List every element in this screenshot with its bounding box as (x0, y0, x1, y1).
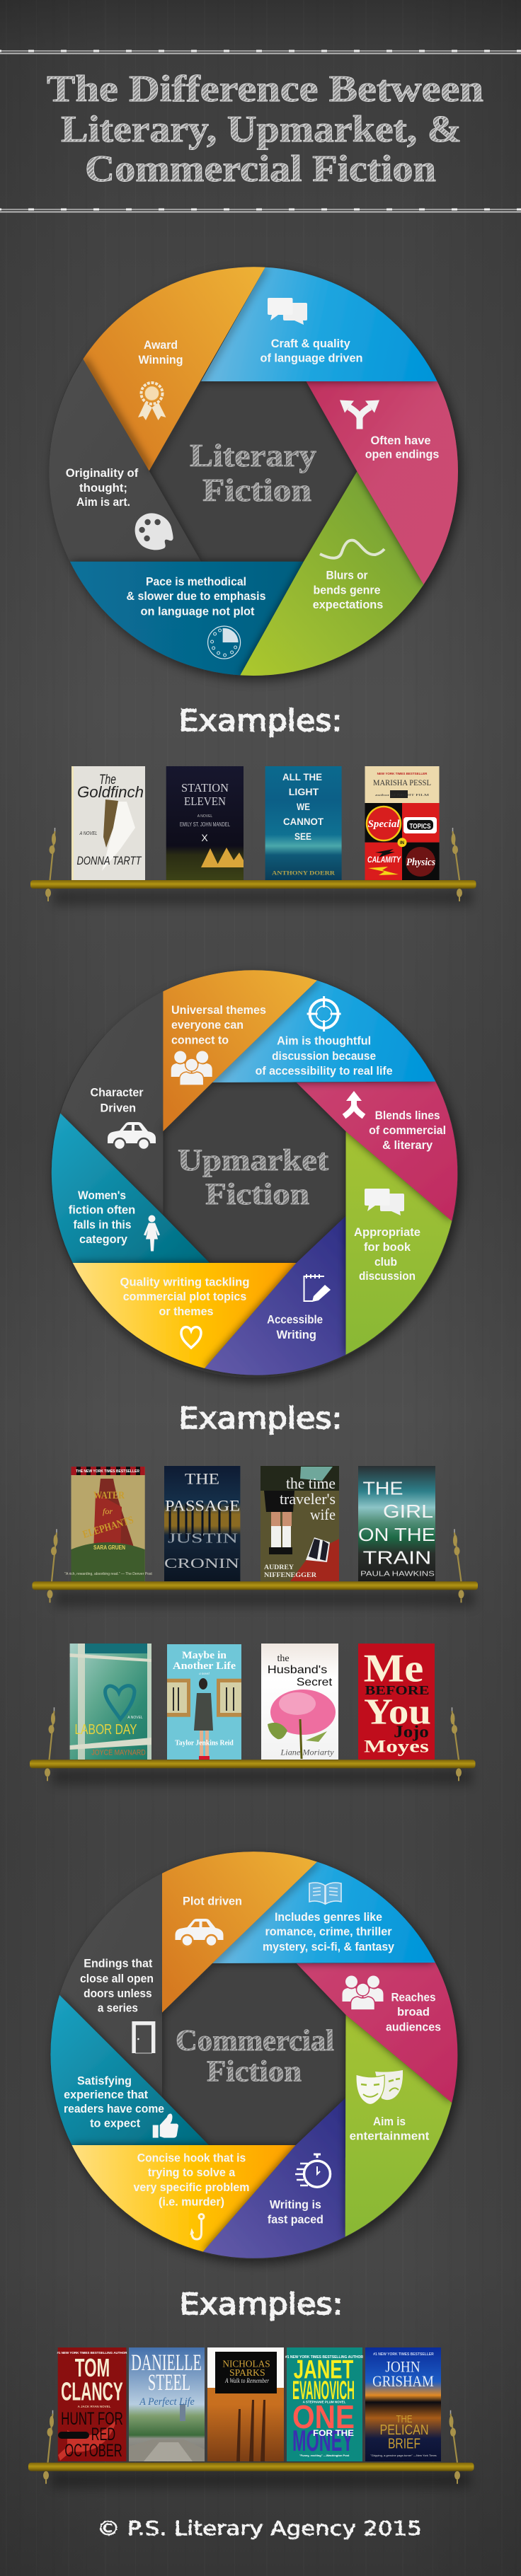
label: blends lines: Blends lines (375, 1109, 440, 1122)
label: blends lines (369, 1109, 446, 1152)
heading: examples (upmarket): Examples: (178, 1401, 343, 1436)
heading: examples (commercial): Examples: (180, 2287, 343, 2321)
book: All the Light We Cannot See: CANNOT (283, 816, 324, 827)
title text: Commercial Fiction (85, 149, 436, 190)
blade: pink (297, 1963, 457, 2103)
label: universal themes: Universal themes (171, 1003, 266, 1017)
label: satisfying experience: experience that (64, 2088, 148, 2101)
center title: Commercial Fiction (176, 2025, 334, 2089)
label: aim thoughtful: of accessibility to real life (256, 1064, 393, 1078)
label: entertainment: entertainment (350, 2130, 430, 2142)
icon: door (132, 2021, 155, 2053)
label: womens fiction: falls in this (74, 1218, 132, 1232)
label: endings: Endings that (84, 1957, 153, 1970)
book: The Time Traveler's Wife: NIFFENEGGER (264, 1572, 316, 1579)
blade: yellow (73, 1263, 297, 1368)
label: aim thoughtful (256, 1034, 393, 1078)
label: aim thoughtful: discussion because (272, 1049, 376, 1063)
label: includes genres (263, 1910, 395, 1953)
book: Me Before You (358, 1644, 435, 1760)
icon: people (343, 1975, 384, 2010)
book: Special Topics in Calamity Physics (365, 766, 440, 880)
center title: Literary Fiction (190, 437, 316, 508)
blade: dark grey (59, 1873, 162, 2097)
icon: clock (208, 626, 241, 659)
label: concise hook: very specific problem (133, 2181, 249, 2194)
book: A Perfect Life: STEEL (148, 2370, 190, 2396)
label: craft and quality (260, 337, 362, 364)
book: Station Eleven: STATION (181, 781, 229, 795)
book: Special Topics in Calamity Physics: author of NIGHT FILM (375, 793, 429, 797)
book: Water for Elephants: THE NEW YORK TIMES BESTSELLER (76, 1469, 139, 1474)
label: reaches broad audiences: broad (397, 2005, 430, 2018)
book: The Girl on the Train: PAULA HAWKINS (360, 1571, 435, 1578)
label: book club: club (374, 1255, 397, 1269)
shelf: upmarket row two (30, 1707, 476, 1785)
label: endings (80, 1957, 154, 2015)
book: The Girl on the Train: ON THE (358, 1524, 435, 1545)
book: A Perfect Life: A Perfect Life (139, 2396, 195, 2408)
book shelf: literary examples (71, 766, 440, 880)
blade: green (345, 1131, 452, 1355)
blade: purple (205, 1216, 345, 1375)
book: The Hunt for Red October: TOM (75, 2353, 110, 2382)
label: character driven: Character (91, 1085, 144, 1099)
label: accessible writing (267, 1313, 323, 1341)
book: Me Before You: BEFORE (365, 1683, 429, 1697)
book: Maybe in Another Life: Taylor Jenkins Reid (175, 1740, 234, 1748)
label: character driven (91, 1085, 144, 1114)
book: The Goldfinch (71, 766, 145, 880)
label: accessible writing: Accessible (267, 1313, 323, 1327)
book: Labor Day (70, 1644, 151, 1760)
book: One for the Money: FOR THE (313, 2428, 354, 2438)
label: satisfying experience: readers have come (64, 2102, 164, 2115)
wheel blades (49, 267, 459, 676)
book: Maybe in Another Life: Another Life (173, 1660, 236, 1672)
book: Maybe in Another Life: a novel (199, 1673, 210, 1676)
label: endings: close all open (80, 1972, 154, 1985)
book: One for the Money: "Funny, exciting" —Washington Post (299, 2454, 350, 2457)
blade: pink (306, 381, 459, 584)
label: award winning: Winning (139, 353, 183, 366)
label: satisfying experience: Satisfying (77, 2074, 132, 2087)
footer: copyright: © P.S. Literary Agency 2015 (97, 2517, 422, 2540)
blade: teal (70, 562, 304, 676)
book: A Walk to Remember: NICHOLAS (222, 2360, 270, 2370)
panel: literary fiction wheel (49, 267, 459, 676)
book: All the Light We Cannot See: ALL THE (282, 771, 322, 782)
book: The Husband's Secret: Husband's (268, 1664, 327, 1676)
book shelf: commercial examples: EVANOVICH (292, 2376, 355, 2405)
book: The Time Traveler's Wife (260, 1466, 339, 1581)
book: Water for Elephants: WATER (93, 1490, 125, 1501)
blade: teal (50, 1995, 209, 2145)
book: The Pelican Brief: JOHN (385, 2358, 420, 2376)
book: A Perfect Life (129, 2347, 205, 2461)
book: The Husband's Secret (261, 1644, 338, 1760)
label: womens fiction: fiction often (69, 1203, 135, 1217)
label: fast paced (268, 2197, 324, 2226)
book: Special Topics in Calamity Physics: MARISHA PESSL (373, 778, 431, 787)
book: Me Before You: Jojo (394, 1723, 429, 1742)
label: universal themes (171, 1003, 266, 1047)
wheel blades (50, 1852, 457, 2258)
label: concise hook: Concise hook that is (137, 2151, 246, 2165)
book: The Pelican Brief: THE (396, 2413, 412, 2425)
book: Station Eleven: X (201, 832, 208, 843)
book: The Girl on the Train (358, 1466, 435, 1581)
label: aim thoughtful: Aim is thoughtful (277, 1034, 371, 1048)
book: The Pelican Brief: "Gripping, a genuine page-turner" —New York Times (370, 2454, 437, 2457)
center title: Commercial Fiction: Fiction (207, 2056, 302, 2089)
label: entertainment (350, 2115, 430, 2142)
book: The Passage: CRONIN (164, 1556, 239, 1571)
book: A Walk to Remember: SPARKS (229, 2368, 265, 2379)
shelf: commercial (28, 2410, 474, 2488)
blade: green (240, 471, 424, 676)
book: Water for Elephants (64, 1467, 152, 1581)
book: Maybe in Another Life (167, 1644, 241, 1760)
book: The Time Traveler's Wife: AUDREY (264, 1564, 294, 1571)
label: blends lines: of commercial (369, 1124, 446, 1137)
icon: speech bubbles (268, 298, 307, 325)
label: open endings: open endings (365, 448, 439, 461)
book: All the Light We Cannot See: LIGHT (289, 786, 319, 797)
title text: The Difference Between (47, 69, 483, 110)
book: The Hunt for Red October: HUNT FOR (61, 2409, 123, 2429)
label: concise hook: (i.e. murder) (159, 2195, 224, 2209)
label: pace: on language not plot (140, 605, 255, 618)
icon: theatre masks (356, 2070, 403, 2104)
book: The Girl on the Train: GIRL (383, 1501, 433, 1522)
label: award winning: Award (144, 338, 178, 352)
book: One for the Money (285, 2347, 363, 2461)
label: quality writing: Quality writing tackling (120, 1275, 249, 1289)
label: pace: Pace is methodical (146, 575, 246, 589)
blade: orange (83, 267, 265, 471)
label: reaches broad audiences: Reaches (391, 1991, 436, 2004)
center title: Literary Fiction: Fiction (202, 472, 311, 508)
icon: fish hook (190, 2214, 204, 2239)
label: womens fiction: category (79, 1232, 128, 1246)
book: Me Before You: Moyes (364, 1738, 429, 1757)
blade: purple (203, 2098, 345, 2258)
blade: orange (162, 1852, 317, 2013)
book: The Hunt for Red October (57, 2347, 127, 2461)
book: The Time Traveler's Wife: the time (286, 1474, 336, 1492)
book: The Hunt for Red October: #1 NEW YORK TIMES BESTSELLING AUTHOR (57, 2351, 127, 2355)
book shelf: upmarket examples row two (70, 1644, 435, 1760)
label: originality: thought; (79, 481, 127, 495)
book: A Walk to Remember: A Walk to Remember (224, 2377, 269, 2384)
label: universal themes: connect to (171, 1033, 229, 1047)
title text: Literary, Upmarket, & (61, 109, 462, 150)
book: A Perfect Life: DANIELLE (131, 2350, 202, 2376)
book: The Goldfinch: The (99, 773, 116, 787)
book: The Hunt for Red October: A JACK RYAN NOVEL (78, 2405, 111, 2408)
book: Me Before You: Me (364, 1647, 423, 1691)
book: Special Topics in Calamity Physics: Special (368, 819, 400, 830)
book: The Hunt for Red October: CLANCY (61, 2377, 123, 2406)
label: plot driven: Plot driven (183, 1895, 242, 1908)
blade: pink (297, 1082, 457, 1221)
book: One for the Money: ONE (292, 2398, 355, 2435)
icon: target (307, 996, 341, 1032)
label: award winning (139, 338, 183, 366)
title text (47, 69, 483, 190)
label: satisfying experience (64, 2074, 164, 2130)
icon: heart (181, 1327, 201, 1348)
label: open endings: Often have (371, 434, 430, 447)
icon: car (176, 1919, 224, 1946)
center title: Upmarket Fiction: Upmarket (178, 1144, 329, 1177)
icon: people (171, 1051, 212, 1085)
label: fast paced: fast paced (268, 2212, 324, 2226)
label: fast paced: Writing is (270, 2197, 321, 2211)
label: book club: discussion (359, 1269, 416, 1283)
blade: blue (201, 267, 438, 381)
center title: Literary Fiction: Literary (190, 437, 316, 473)
book: One for the Money: #1 NEW YORK TIMES BESTSELLING AUTHOR (285, 2355, 363, 2360)
book: Station Eleven (166, 766, 244, 880)
label: pace: & slower due to emphasis (126, 589, 266, 603)
book shelf: upmarket examples row one (64, 1466, 435, 1581)
book: A Walk to Remember (207, 2347, 284, 2461)
label: book club: for book (364, 1240, 411, 1254)
book: All the Light We Cannot See: ANTHONY DOERR (272, 870, 335, 877)
label: concise hook: trying to solve a (148, 2166, 236, 2179)
book: The Girl on the Train: TRAIN (363, 1547, 431, 1569)
label: includes genres: romance, crime, thriller (265, 1925, 392, 1939)
book: The Passage (164, 1466, 240, 1581)
label: quality writing (120, 1275, 249, 1318)
label: concise hook (133, 2151, 249, 2209)
label: book club: Appropriate (354, 1225, 420, 1239)
book: The Pelican Brief: BRIEF (388, 2437, 420, 2452)
icon: open book (309, 1883, 341, 1904)
book: Labor Day: JOYCE MAYNARD (91, 1749, 146, 1757)
book: The Pelican Brief: #1 NEW YORK TIMES BESTSELLER (373, 2352, 434, 2357)
label: satisfying experience: to expect (90, 2117, 140, 2130)
book: The Time Traveler's Wife: wife (310, 1506, 336, 1523)
book: Station Eleven: EMILY ST. JOHN MANDEL (180, 821, 230, 828)
book: Labor Day: A NOVEL (127, 1716, 143, 1720)
label: originality: Originality of (66, 466, 139, 480)
icon: squiggle (320, 541, 384, 558)
book: One for the Money: A STEPHANIE PLUM NOVEL (303, 2400, 346, 2404)
icon: woman (144, 1215, 160, 1251)
blade: green (345, 2015, 452, 2237)
icon: forked arrow (340, 400, 379, 429)
book: Water for Elephants: ELEPHANTS (81, 1515, 135, 1541)
label: blurs genre: bends genre (313, 583, 381, 597)
icon: merging arrow (344, 1091, 364, 1116)
book: The Husband's Secret: the (277, 1653, 290, 1664)
label: originality: Aim is art. (76, 495, 130, 509)
book: The Goldfinch: A NOVEL (79, 831, 98, 836)
center title: Upmarket Fiction (178, 1144, 329, 1211)
book: One for the Money: JANET (294, 2355, 354, 2384)
shelf: upmarket row one (33, 1529, 478, 1607)
blade: teal (52, 1114, 210, 1263)
book: Maybe in Another Life: Maybe in (182, 1650, 227, 1661)
book: All the Light We Cannot See: SEE (294, 831, 311, 842)
label: reaches broad audiences: audiences (386, 2021, 441, 2034)
book: Water for Elephants: SARA GRUEN (93, 1544, 125, 1551)
icon: palette (135, 513, 173, 550)
book: Special Topics in Calamity Physics: NEW YORK TIMES BESTSELLER (377, 772, 428, 775)
center title: Commercial Fiction: Commercial (176, 2025, 334, 2057)
book: Water for Elephants: "A rich, rewarding, absorbing read." — The Denver Post (64, 1572, 152, 1576)
panel: upmarket fiction wheel (50, 970, 458, 1377)
icon: speech bubbles (365, 1189, 404, 1215)
label: originality (66, 466, 139, 509)
book: The Passage: JUSTIN (168, 1531, 238, 1547)
blade: dark grey (60, 991, 163, 1215)
shelf: literary (30, 828, 476, 906)
label: blends lines: & literary (382, 1138, 433, 1152)
book: The Husband's Secret: Liane Moriarty (280, 1748, 334, 1757)
book: The Hunt for Red October: OCTOBER (64, 2441, 122, 2461)
book: The Time Traveler's Wife: traveler's (280, 1490, 336, 1508)
center title: Upmarket Fiction: Fiction (205, 1178, 309, 1211)
icon: medal (138, 383, 166, 420)
label: includes genres: Includes genres like (275, 1910, 382, 1924)
book: The Goldfinch: DONNA TARTT (76, 854, 142, 867)
heading: examples (literary): Examples: (178, 703, 343, 738)
book: Station Eleven: ELEVEN (184, 795, 226, 808)
label: character driven: Driven (101, 1101, 136, 1114)
book: Water for Elephants: for (103, 1506, 113, 1516)
label: book club (354, 1225, 420, 1283)
label: pace (126, 575, 266, 618)
book: Station Eleven: A NOVEL (197, 814, 212, 819)
label: includes genres: mystery, sci-fi, & fantasy (263, 1940, 395, 1953)
label: blurs genre (313, 569, 383, 611)
book: The Goldfinch: Goldfinch (77, 783, 144, 801)
label: quality writing: or themes (159, 1305, 214, 1318)
book: The Husband's Secret: Secret (297, 1677, 333, 1689)
book: Special Topics in Calamity Physics: CALAMITY (367, 855, 401, 865)
label: blurs genre: Blurs or (326, 569, 368, 582)
blade: blue (212, 981, 435, 1082)
panel: commercial fiction wheel (50, 1852, 457, 2259)
label: endings: doors unless (84, 1987, 152, 2000)
label: accessible writing: Writing (276, 1328, 316, 1341)
book: The Girl on the Train: THE (362, 1478, 403, 1499)
book shelf: commercial examples (57, 2347, 441, 2461)
label: open endings (365, 434, 439, 461)
book: Special Topics in Calamity Physics: IN (400, 841, 404, 845)
blade: blue (212, 1862, 435, 1963)
icon: stopwatch (295, 2154, 330, 2187)
label: womens fiction: Women's (78, 1189, 126, 1202)
icon: thumbs up (153, 2113, 178, 2138)
icon: car (108, 1122, 156, 1150)
label: craft and quality: Craft & quality (271, 337, 350, 350)
icon: notepad and pencil (304, 1274, 331, 1302)
label: womens fiction (69, 1189, 135, 1246)
book: Special Topics in Calamity Physics: TOPICS (409, 823, 431, 831)
book: The Passage: PASSAGE (165, 1497, 240, 1515)
book: The Pelican Brief: GRISHAM (372, 2372, 434, 2390)
label: universal themes: everyone can (171, 1018, 244, 1032)
blade: orange (163, 970, 317, 1131)
book: The Hunt for Red October: RED (91, 2425, 115, 2444)
book: Special Topics in Calamity Physics: Physics (406, 857, 435, 868)
label: craft and quality: of language driven (260, 351, 362, 364)
book: Me Before You: You (364, 1692, 431, 1733)
book: The Passage: THE (185, 1470, 219, 1488)
book: All the Light We Cannot See: WE (297, 801, 310, 812)
blade: yellow (72, 2145, 296, 2252)
book: The Pelican Brief (365, 2347, 441, 2461)
label: reaches broad audiences (386, 1991, 441, 2034)
book: Labor Day: LABOR DAY (75, 1722, 137, 1738)
label: entertainment: Aim is (373, 2115, 406, 2128)
book: All the Light We Cannot See (265, 766, 342, 880)
wheel blades (52, 970, 457, 1375)
book: The Pelican Brief: PELICAN (379, 2422, 429, 2438)
blade: dark grey (49, 359, 201, 562)
label: blurs genre: expectations (313, 598, 383, 611)
label: endings: a series (98, 2001, 138, 2015)
label: quality writing: commercial plot topics (123, 1290, 246, 1303)
title block (0, 50, 521, 212)
book: One for the Money: MONEY (292, 2424, 353, 2457)
